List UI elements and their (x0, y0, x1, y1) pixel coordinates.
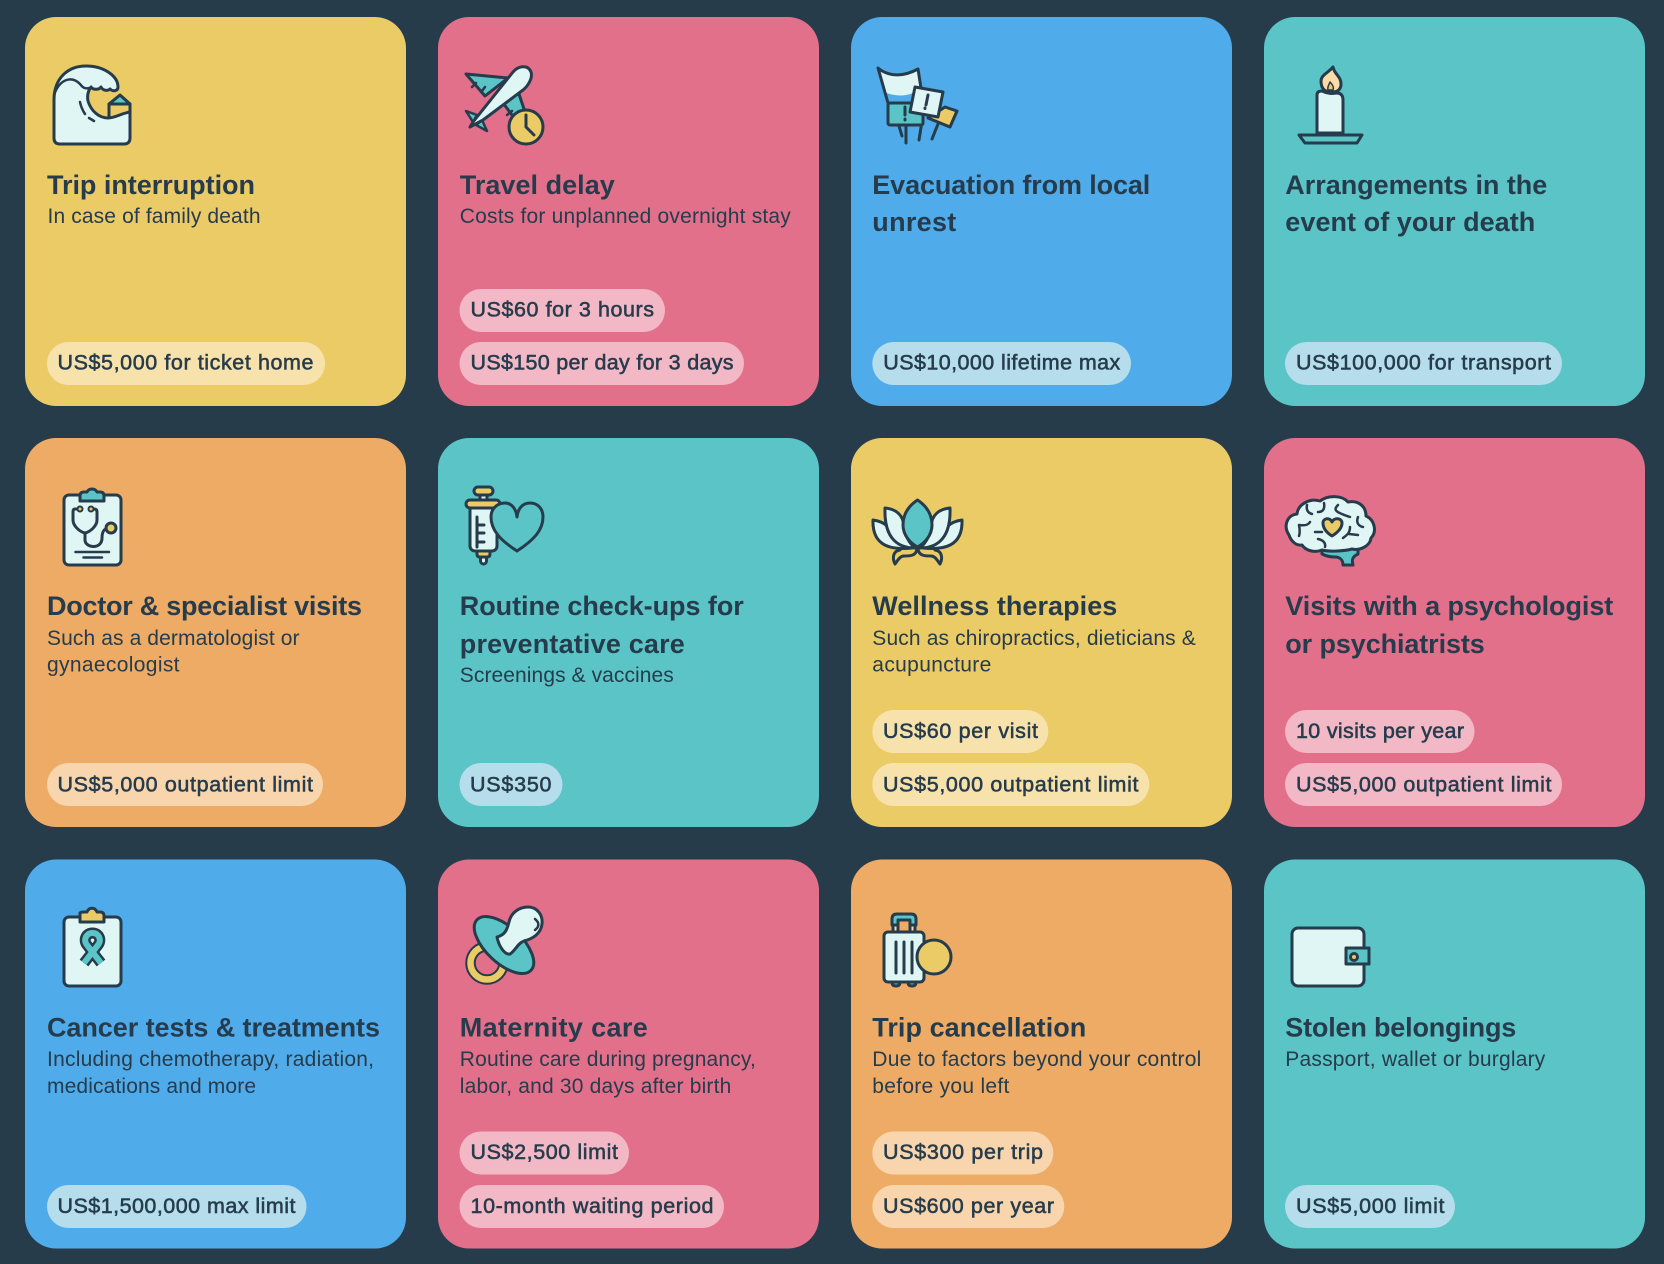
icon: plane and clock (466, 67, 543, 144)
pill: limit (47, 342, 325, 385)
description: Including chemotherapy, radiation, (47, 1048, 374, 1071)
pill: limit: US$5,000 for ticket home (58, 350, 314, 374)
pill: per hours: US$60 for 3 hours (470, 298, 654, 322)
heading: Routine check-ups for (460, 591, 744, 621)
pill: limit (1285, 1185, 1455, 1228)
pill: per day (460, 342, 744, 385)
heading (1285, 591, 1613, 659)
heading: or psychiatrists (1285, 629, 1485, 659)
heading: Stolen belongings (1285, 1012, 1516, 1042)
pill: outpatient: US$5,000 outpatient limit (883, 772, 1139, 796)
heading: Arrangements in the (1285, 170, 1547, 200)
description: before you left (872, 1075, 1009, 1098)
panel: arrangements (1264, 17, 1645, 406)
heading: unrest (872, 207, 956, 237)
panel: travel delay (438, 17, 819, 406)
pill: limit: US$2,500 limit (470, 1140, 618, 1164)
panel: doctor visits (25, 438, 406, 827)
pill: price (460, 763, 562, 806)
icon: clipboard with ribbon (64, 908, 121, 986)
panel: wellness therapies (851, 438, 1232, 827)
description: Such as a dermatologist or (47, 627, 300, 650)
pill: transport (1285, 342, 1562, 385)
pill: per year: US$600 per year (883, 1194, 1054, 1218)
heading (460, 591, 744, 659)
pill: outpatient (1285, 763, 1562, 806)
pill: per day: US$150 per day for 3 days (470, 350, 734, 374)
heading: Maternity care (460, 1012, 648, 1042)
pill: lifetime: US$10,000 lifetime max (883, 350, 1121, 374)
pill: per visit (872, 710, 1048, 753)
panel: trip interruption (25, 17, 406, 406)
pill: outpatient (872, 763, 1149, 806)
panel: trip cancellation (851, 860, 1232, 1248)
heading (1285, 170, 1547, 237)
icon: wallet (1292, 928, 1369, 986)
pill: max limit (47, 1185, 306, 1228)
pill: visits per year (1285, 710, 1474, 753)
heading: event of your death (1285, 207, 1535, 237)
panel: routine check-ups (438, 438, 819, 827)
pill: per visit: US$60 per visit (883, 719, 1038, 743)
pill: visits per year: 10 visits per year (1296, 719, 1464, 743)
description (460, 1048, 756, 1098)
pill: per trip: US$300 per trip (883, 1140, 1043, 1164)
pill: outpatient: US$5,000 outpatient limit (58, 772, 313, 796)
description: labor, and 30 days after birth (460, 1075, 731, 1098)
icon: pacifier (465, 907, 543, 983)
pill: lifetime (872, 342, 1131, 385)
heading: Doctor & specialist visits (47, 591, 362, 621)
description: medications and more (47, 1075, 256, 1098)
description: Such as chiropractics, dieticians & (872, 627, 1196, 650)
description (872, 627, 1196, 676)
pill: per trip (872, 1132, 1053, 1174)
description: gynaecologist (47, 654, 180, 676)
pill: price: US$350 (470, 772, 552, 796)
pill: waiting period (460, 1185, 724, 1228)
pill: per year (872, 1185, 1064, 1228)
pill: limit: US$5,000 limit (1296, 1194, 1445, 1218)
description: Screenings & vaccines (460, 664, 674, 687)
icon: wave and house (54, 66, 130, 144)
description (47, 1048, 374, 1098)
description: In case of family death (48, 205, 260, 228)
heading: Cancer tests & treatments (47, 1012, 380, 1042)
icon: clipboard with stethoscope (64, 489, 121, 565)
description (47, 627, 300, 676)
description: Passport, wallet or burglary (1285, 1048, 1546, 1071)
icon: protest signs (878, 68, 957, 143)
heading: Visits with a psychologist (1285, 591, 1613, 621)
pill: transport: US$100,000 for transport (1296, 350, 1551, 374)
heading: Travel delay (460, 170, 615, 200)
icon: brain with heart (1286, 497, 1374, 565)
icon: lotus (873, 500, 962, 564)
pill: waiting period: 10-month waiting period (470, 1194, 714, 1218)
panel: stolen belongings (1264, 860, 1645, 1248)
panel: psychologist visits (1264, 438, 1645, 827)
description: Due to factors beyond your control (872, 1048, 1201, 1071)
icon: syringe and heart (466, 487, 543, 564)
heading: Evacuation from local (872, 170, 1150, 200)
pill: limit (460, 1132, 629, 1174)
pill: outpatient: US$5,000 outpatient limit (1296, 772, 1552, 796)
pill: max limit: US$1,500,000 max limit (58, 1194, 296, 1218)
pill: outpatient (47, 763, 323, 806)
heading: preventative care (460, 629, 685, 659)
heading: Trip interruption (47, 170, 255, 200)
heading: Wellness therapies (872, 591, 1117, 621)
panel: maternity care (438, 860, 819, 1248)
heading: Trip cancellation (872, 1012, 1086, 1042)
description: Routine care during pregnancy, (460, 1048, 756, 1071)
pill: per hours (460, 289, 665, 332)
description (872, 1048, 1201, 1098)
icon: candle (1299, 67, 1362, 143)
heading (872, 170, 1150, 237)
icon: suitcase and coin (884, 914, 951, 986)
panel: evacuation (851, 17, 1232, 406)
panel: cancer tests (25, 860, 406, 1248)
description: Costs for unplanned overnight stay (460, 205, 791, 228)
description: acupuncture (872, 654, 991, 676)
